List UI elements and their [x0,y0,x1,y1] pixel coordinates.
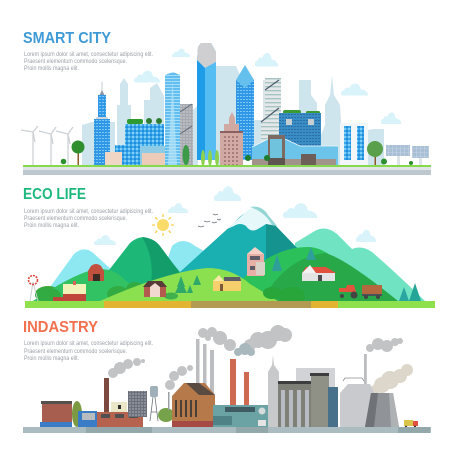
solar panels [386,145,429,165]
building: dark blue roof garden [279,110,321,151]
barn: cream roof [53,281,86,301]
trees: poplars [182,145,219,166]
smoke: cooling tower steam [371,364,413,394]
tree right [367,141,413,165]
chimneys: grey [196,339,367,395]
mountains: cyan left [40,241,210,301]
tower: grey [180,104,193,165]
text block: eco life description [24,209,153,229]
building: glass hall [245,135,338,165]
tower: olive grey [310,373,329,427]
text block: indastry description [24,341,153,362]
clouds: eco sky [94,186,376,245]
title: indastry: INDASTRY [23,319,98,336]
bushes: foothill [35,282,144,302]
brick building left [40,401,97,427]
skyline: pale background towers [82,66,384,165]
title: eco life: ECO LIFE [23,186,86,203]
tower: light blue tapered [165,72,180,165]
text block: smart city description: Lorem ipsum dolor sit amet, consectetur adipiscing elit. [24,52,153,58]
road: industry ground [23,427,431,433]
building: blue tile block [105,118,175,165]
tower: left blue spire [94,82,110,165]
factory: red brick with chimney [97,378,143,427]
text block: smart city description: Proin mollis magna elit. [24,66,79,72]
building: dark grey [128,391,147,417]
panel: indastry [23,319,431,433]
tank: dark blue [328,387,338,427]
clouds: city sky [134,49,401,124]
panel: smart city [21,30,431,175]
building: brown stepped tower [220,112,243,165]
hill: green right [225,247,398,301]
text block: eco life description: Proin mollis magna elit. [24,223,79,229]
road: city ground [23,165,431,175]
tower: tall blue with grey cap [197,43,216,160]
icon: sun [152,214,174,236]
text block: indastry description: Proin mollis magna elit. [24,356,79,362]
tree: industry [158,408,174,422]
factory: light grey [340,378,374,427]
factory: brown with roof [168,383,215,427]
hill: lime front [100,268,278,301]
bushes: behind hills left [35,286,61,302]
smoke clouds [108,325,403,390]
tower: striped white [261,78,281,150]
factory: teal with red chimneys [213,359,268,427]
trees: small pines [175,247,421,301]
title: smart city: SMART CITY [23,30,111,47]
water tower [150,386,158,421]
bushes: front [164,287,305,305]
cooling tower [365,393,399,427]
panel: eco life [23,186,435,308]
backdrop: pale buildings [268,355,335,427]
hill: green left [33,269,150,301]
silos: grey concrete [278,381,311,427]
road: eco ground [25,301,435,308]
text block: eco life description: Praesent elementum commodo scelerisque. [24,216,127,222]
house: yellow [213,275,241,291]
tractor and trailer [339,285,382,299]
house: white with red roof [302,265,336,281]
text block: indastry description: Praesent elementum commodo scelerisque. [24,349,127,355]
barn: hillside red [88,264,104,281]
text block: eco life description: Lorem ipsum dolor sit amet, consectetur adipiscing elit. [24,209,153,215]
tree and shrub left [61,140,84,165]
mountain: teal snow peak [180,207,297,300]
building: white with blue tiles [340,123,368,165]
house: pink [247,247,265,276]
mountain: mint right [295,228,425,301]
text block: smart city description [24,52,153,72]
windmill [28,276,38,301]
tower: blue diamond [236,65,254,160]
mountain: green center [85,237,180,301]
text block: smart city description: Praesent elementum commodo scelerisque. [24,59,127,65]
birds [198,214,221,227]
house: brown roof [143,281,167,297]
truck [404,420,418,428]
text block: indastry description: Lorem ipsum dolor sit amet, consectetur adipiscing elit. [24,341,153,347]
wind turbines [21,126,73,165]
